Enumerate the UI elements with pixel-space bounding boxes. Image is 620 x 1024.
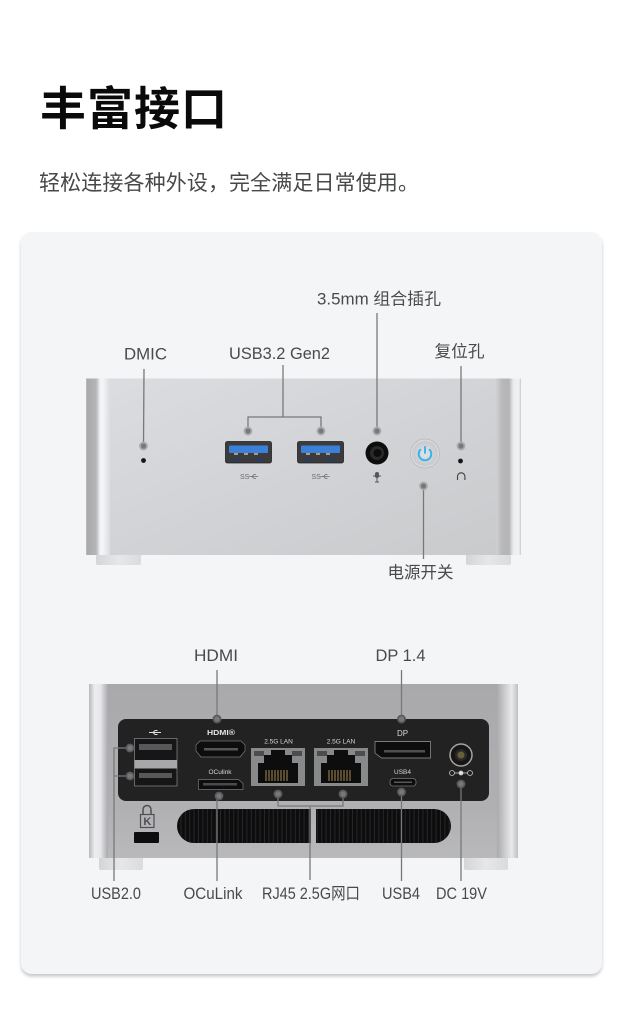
SS USB icon right: SS — [312, 474, 321, 481]
power button — [410, 439, 440, 468]
USB-C port — [390, 778, 416, 786]
rear foot right — [464, 853, 508, 870]
label: 3.5mm combo jack: 3.5mm 组合插孔 — [317, 290, 441, 308]
label: DP 1.4: DP 1.4 — [376, 647, 426, 665]
RJ45 port 1 — [251, 748, 305, 786]
USB 3.2 port left — [226, 442, 272, 463]
label: DC 19V: DC 19V — [436, 885, 487, 903]
panel: ports background — [21, 232, 602, 974]
HDMI logo: HDMI® — [207, 729, 236, 737]
rear device — [89, 684, 518, 870]
label: USB2.0: USB2.0 — [91, 885, 141, 903]
label: USB2.0 — [91, 744, 141, 903]
label: HDMI — [194, 647, 238, 722]
subtitle: 轻松连接各种外设，完全满足日常使用。 — [39, 167, 419, 197]
USB4 caption: USB4 — [394, 769, 411, 776]
front device — [86, 378, 521, 565]
OCuLink port — [198, 780, 243, 790]
label: USB4: USB4 — [382, 885, 420, 903]
title: 丰富接口 — [40, 73, 227, 139]
label: HDMI: HDMI — [194, 647, 238, 665]
OCulink caption: OCulink — [208, 769, 232, 776]
DC jack — [450, 744, 472, 766]
label: RJ45 2.5G LAN — [262, 790, 360, 903]
mic headset icon — [373, 472, 381, 482]
label: DP 1.4 — [376, 647, 426, 722]
SS USB icon left: SS — [240, 474, 250, 481]
USB 2.0 icon — [149, 730, 161, 734]
Kensington lock icon: K — [143, 816, 151, 828]
reset hole — [458, 459, 463, 463]
front body — [86, 378, 521, 555]
HDMI port — [196, 741, 245, 757]
label: power switch — [388, 482, 454, 582]
rear right edge — [497, 684, 518, 858]
front right edge — [496, 378, 521, 555]
SS USB icon right — [312, 474, 330, 481]
label: reset hole: 复位孔 — [434, 342, 484, 361]
Kensington lock icon — [140, 806, 154, 828]
label: DC 19V — [436, 780, 487, 903]
front left edge — [86, 378, 110, 555]
label: USB3.2 Gen2: USB3.2 Gen2 — [229, 345, 330, 363]
label: power switch: 电源开关 — [388, 563, 454, 582]
DP caption: DP — [397, 729, 408, 738]
USB 3.2 port right — [298, 442, 344, 463]
DMIC hole — [141, 458, 146, 463]
RJ45 port 2 — [314, 748, 368, 786]
label: OCuLink — [184, 792, 243, 903]
label: USB4 — [382, 788, 420, 903]
rear black IO plate — [118, 719, 489, 801]
LAN caption 2: 2.5G LAN — [327, 738, 356, 746]
LAN caption 1: 2.5G LAN — [264, 738, 293, 746]
SS USB icon left — [240, 474, 258, 481]
rear left edge — [89, 684, 108, 858]
label: USB3.2 Gen2 — [229, 345, 330, 434]
label: 3.5mm combo jack — [317, 290, 441, 434]
label: DMIC — [124, 346, 167, 450]
front foot left — [96, 550, 141, 565]
headphone icon — [458, 473, 465, 480]
label: reset hole — [434, 342, 484, 450]
front foot right — [466, 550, 511, 565]
vent left — [177, 809, 311, 843]
DisplayPort port — [375, 742, 430, 758]
label: RJ45 2.5G LAN: RJ45 2.5G网口 — [262, 885, 360, 903]
DC polarity symbol — [450, 770, 472, 776]
rear body — [89, 684, 518, 858]
rear foot left — [99, 853, 143, 870]
USB 2.0 stacked ports — [134, 738, 177, 786]
label: OCuLink: OCuLink — [184, 885, 243, 903]
vent right — [316, 809, 451, 843]
label: DMIC: DMIC — [124, 346, 167, 364]
lock slot — [134, 832, 159, 843]
audio jack — [366, 442, 388, 464]
